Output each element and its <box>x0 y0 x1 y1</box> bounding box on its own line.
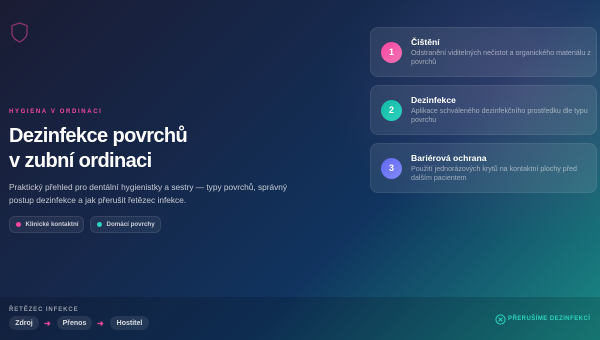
step 1 text <box>411 49 591 66</box>
tag: household surfaces <box>90 216 161 233</box>
eyebrow label: HYGIENA V ORDINACI <box>9 108 102 114</box>
description <box>9 182 287 205</box>
step 3 text: dalším pacientem <box>411 174 467 182</box>
infection chain label: ŘETĚZEC INFEKCE <box>9 307 79 313</box>
step 2 title: Dezinfekce <box>411 95 456 105</box>
title: v zubní ordinaci <box>9 150 152 172</box>
step 3 number <box>381 158 402 178</box>
step 1 title: Čištění <box>411 37 440 47</box>
step 1 number: 1 <box>389 46 394 56</box>
step 3 number: 3 <box>389 162 394 172</box>
icon: shield <box>11 22 28 43</box>
tag: clinical contact surfaces <box>9 216 84 233</box>
title: Dezinfekce povrchů <box>9 124 187 146</box>
footer band <box>0 297 600 340</box>
arrow: ➜ <box>97 319 104 328</box>
step 1 text: povrchů <box>411 58 436 66</box>
step 2 text <box>411 107 588 124</box>
step 3 text: Použití jednorázových krytů na kontaktní plochy před <box>411 165 577 173</box>
step 2 number: 2 <box>389 104 394 114</box>
step 1 text: Odstranění viditelných nečistot a organického materiálu z <box>411 49 591 57</box>
step 1 number <box>381 42 402 62</box>
step 3 text <box>411 165 577 182</box>
tag: household surfaces: Domácí povrchy <box>106 221 155 228</box>
title <box>9 124 187 172</box>
panel: step 2 <box>370 85 597 135</box>
icon: interrupted circle <box>495 314 506 325</box>
description: Praktický přehled pro dentální hygienistky a sestry — typy povrchů, správný <box>9 182 287 192</box>
description: postup dezinfekce a jak přerušit řetězec infekce. <box>9 195 186 205</box>
chain: source: Zdroj <box>15 320 33 327</box>
panel: step 1 <box>370 27 597 77</box>
chain: transmission: Přenos <box>63 320 86 327</box>
interruption label: PŘERUŠÍME DEZINFEKCÍ <box>508 316 590 322</box>
arrow: ➜ <box>44 319 51 328</box>
step 2 number <box>381 100 402 120</box>
chain: host <box>110 316 149 330</box>
step 2 text: Aplikace schváleného dezinfekčního prostředku dle typu <box>411 107 588 115</box>
chain: source <box>9 316 39 330</box>
chain: host: Hostitel <box>117 320 142 327</box>
step 3 title: Bariérová ochrana <box>411 153 486 163</box>
panel: step 3 <box>370 143 597 193</box>
step 2 text: povrchu <box>411 116 436 124</box>
tag: clinical contact surfaces: Klinické kontaktní <box>26 221 78 228</box>
chain: transmission <box>57 316 92 330</box>
